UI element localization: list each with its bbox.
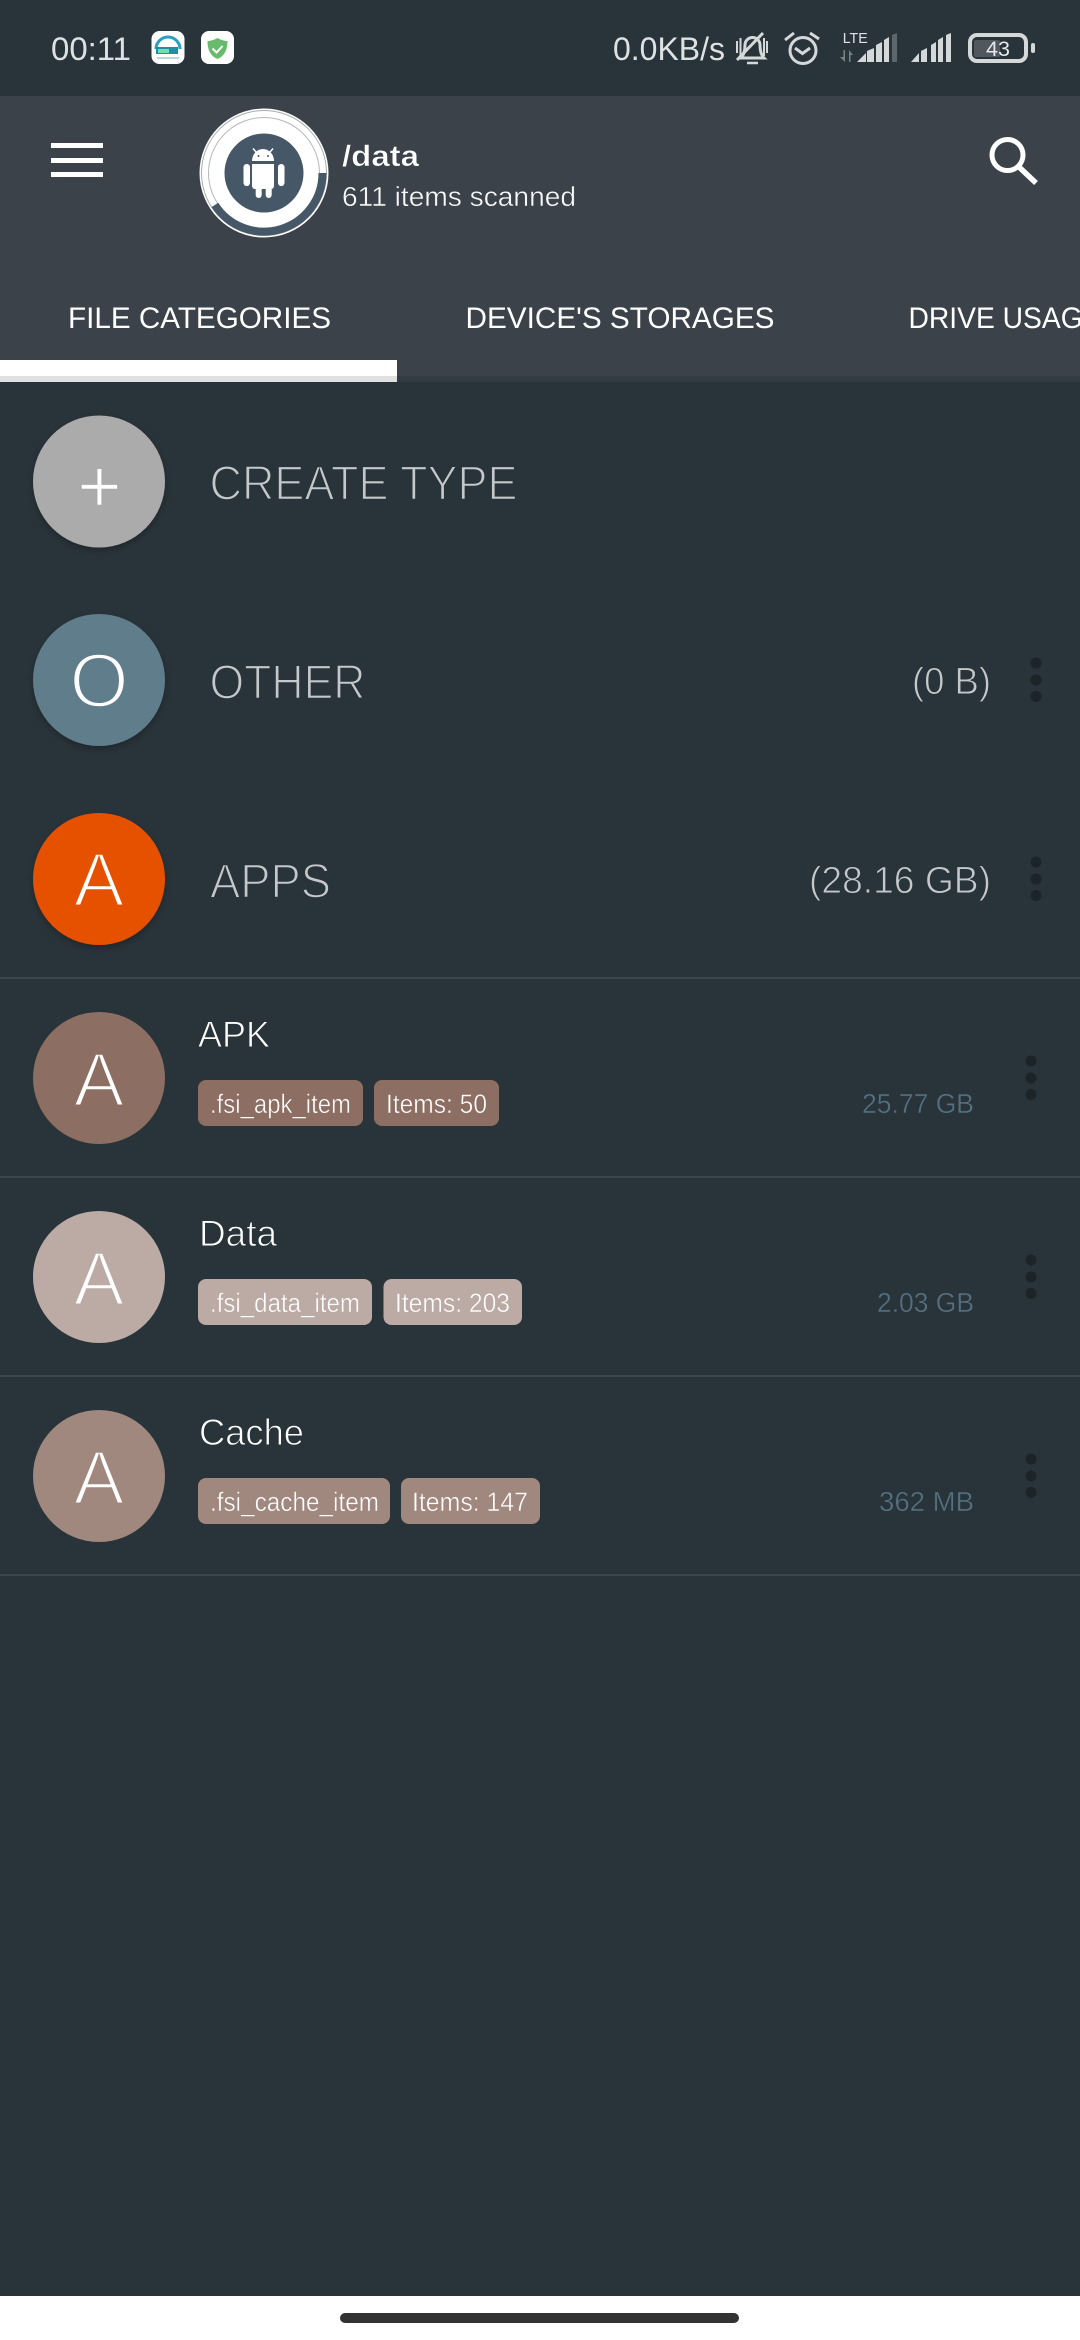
avatar: O: O — [69, 639, 129, 724]
network speed: 0.0KB/s — [613, 31, 725, 67]
clock: 00:11 — [51, 31, 131, 67]
avatar: O — [33, 614, 165, 746]
label: APPS — [210, 856, 331, 908]
tag: class: .fsi_apk_item — [210, 1089, 351, 1119]
size: 25.77 GB — [862, 1088, 974, 1119]
size: 2.03 GB — [877, 1287, 974, 1318]
icon: android — [244, 148, 284, 198]
tag: items — [374, 1080, 499, 1126]
row: create type — [33, 416, 518, 548]
avatar: A — [33, 813, 165, 945]
icon: battery — [970, 35, 1035, 61]
row: cache — [33, 1410, 1036, 1542]
name: Data — [199, 1213, 277, 1254]
icon: LTE signal: LTE — [843, 30, 868, 47]
name: Cache — [199, 1412, 304, 1453]
icon: alarm clock — [785, 33, 819, 64]
tag: items — [384, 1279, 522, 1325]
status bar — [0, 0, 1080, 96]
icon: menu dots — [1030, 658, 1042, 702]
scanned items count: 611 items scanned — [342, 181, 576, 212]
avatar: A: A — [74, 1237, 125, 1322]
avatar: A: A — [74, 1038, 125, 1123]
row: other — [33, 614, 1042, 746]
icon: menu dots — [1030, 856, 1042, 901]
avatar: A — [33, 1012, 165, 1144]
row: apk — [33, 1012, 1036, 1144]
size: (28.16 GB) — [809, 860, 991, 902]
icon: signal bars — [911, 33, 951, 62]
icon: battery: 43 — [986, 38, 1010, 61]
tab: file categories: FILE CATEGORIES — [68, 302, 331, 335]
icon: green shield notification — [201, 31, 234, 64]
label: OTHER — [210, 656, 366, 710]
avatar: A — [33, 1211, 165, 1343]
icon: menu dots — [1026, 1454, 1036, 1498]
tabs — [0, 302, 1080, 382]
name: APK — [198, 1014, 270, 1055]
avatar: A: A — [74, 838, 125, 923]
avatar: plus: + — [77, 444, 122, 529]
tab: device's storages: DEVICE'S STORAGES — [466, 302, 774, 335]
icon: menu dots — [1026, 1056, 1036, 1100]
icon: muted bell — [737, 33, 767, 63]
icon: gauge app notification — [152, 31, 184, 64]
size: 362 MB — [879, 1486, 974, 1517]
icon: menu dots — [1026, 1254, 1036, 1299]
row: data — [33, 1211, 1036, 1343]
tag: class — [198, 1478, 390, 1524]
icon: hamburger menu — [51, 143, 103, 177]
app header — [0, 96, 1080, 382]
navigation bar — [0, 2296, 1080, 2340]
avatar: A — [33, 1410, 165, 1542]
tag: class — [198, 1279, 372, 1325]
tag: items: Items: 203 — [395, 1288, 510, 1318]
storage title: /data — [342, 140, 419, 173]
icon: search — [992, 140, 1036, 183]
storage ring with android icon — [200, 108, 328, 238]
tag: items: Items: 50 — [386, 1089, 487, 1119]
home indicator — [340, 2313, 739, 2323]
icon: LTE signal — [840, 30, 897, 62]
avatar: A: A — [74, 1436, 125, 1521]
tag: class: .fsi_data_item — [210, 1288, 360, 1318]
tag: class: .fsi_cache_item — [210, 1487, 379, 1517]
tag: items: Items: 147 — [412, 1487, 528, 1517]
active tab indicator — [0, 360, 397, 382]
avatar: plus — [33, 416, 165, 548]
row: apps — [33, 813, 1042, 945]
label: CREATE TYPE — [210, 458, 518, 510]
tag: class — [198, 1080, 363, 1126]
size: (0 B) — [912, 661, 991, 703]
tag: items — [401, 1478, 540, 1524]
